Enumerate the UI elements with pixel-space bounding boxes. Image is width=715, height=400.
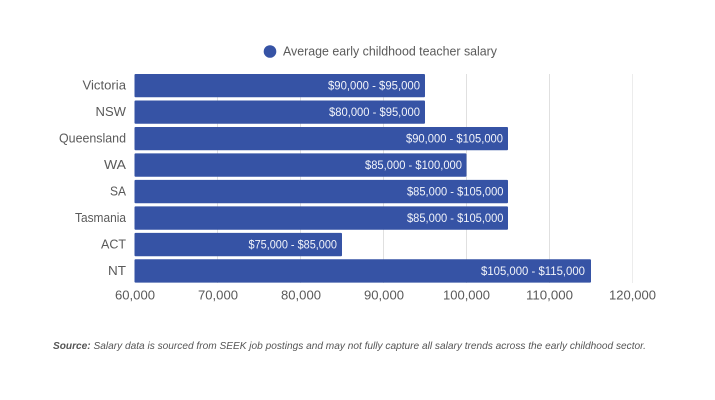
category labels: Queensland bbox=[59, 132, 126, 146]
legend marker bbox=[264, 45, 276, 58]
bar: NSW bbox=[134, 100, 425, 124]
bar: Tasmania bbox=[134, 206, 508, 230]
x axis labels: 120,000 bbox=[609, 288, 656, 302]
x axis labels bbox=[115, 288, 656, 302]
x axis labels: 110,000 bbox=[526, 288, 573, 302]
category labels: WA bbox=[104, 158, 127, 172]
bar: Victoria: $90,000 - $95,000 bbox=[328, 80, 420, 92]
bar: ACT: $75,000 - $85,000 bbox=[248, 240, 337, 252]
bar: Victoria bbox=[134, 74, 425, 97]
category labels: Tasmania bbox=[75, 211, 126, 225]
legend label: Average early childhood teacher salary bbox=[283, 44, 498, 58]
legend bbox=[264, 44, 498, 58]
bar: NSW: $80,000 - $95,000 bbox=[329, 107, 420, 119]
bar: SA: $85,000 - $105,000 bbox=[407, 186, 504, 198]
category labels bbox=[59, 78, 127, 278]
bar: Queensland bbox=[134, 127, 508, 150]
x axis labels: 90,000 bbox=[364, 288, 404, 302]
bar: NT: $105,000 - $115,000 bbox=[481, 266, 585, 278]
source note: Source: Salary data is sourced from SEEK job postings and may not fully capture all salary trends across the early childhood sector. bbox=[53, 340, 646, 352]
x axis labels: 70,000 bbox=[198, 288, 238, 302]
bar: ACT bbox=[134, 233, 342, 256]
bar: WA bbox=[134, 153, 466, 177]
bar chart bbox=[134, 74, 591, 283]
category labels: Victoria bbox=[82, 78, 126, 92]
bar: Tasmania: $85,000 - $105,000 bbox=[407, 213, 504, 225]
x axis labels: 80,000 bbox=[281, 288, 321, 302]
category labels: ACT bbox=[101, 238, 126, 252]
x axis labels: 60,000 bbox=[115, 288, 155, 302]
category labels: NSW bbox=[96, 105, 126, 119]
bar: NT bbox=[134, 259, 591, 283]
bar: Queensland: $90,000 - $105,000 bbox=[406, 134, 503, 146]
bar: SA bbox=[134, 180, 508, 203]
bar: WA: $85,000 - $100,000 bbox=[365, 160, 462, 172]
category labels: SA bbox=[110, 184, 127, 198]
x axis labels: 100,000 bbox=[443, 288, 490, 302]
category labels: NT bbox=[108, 264, 126, 278]
